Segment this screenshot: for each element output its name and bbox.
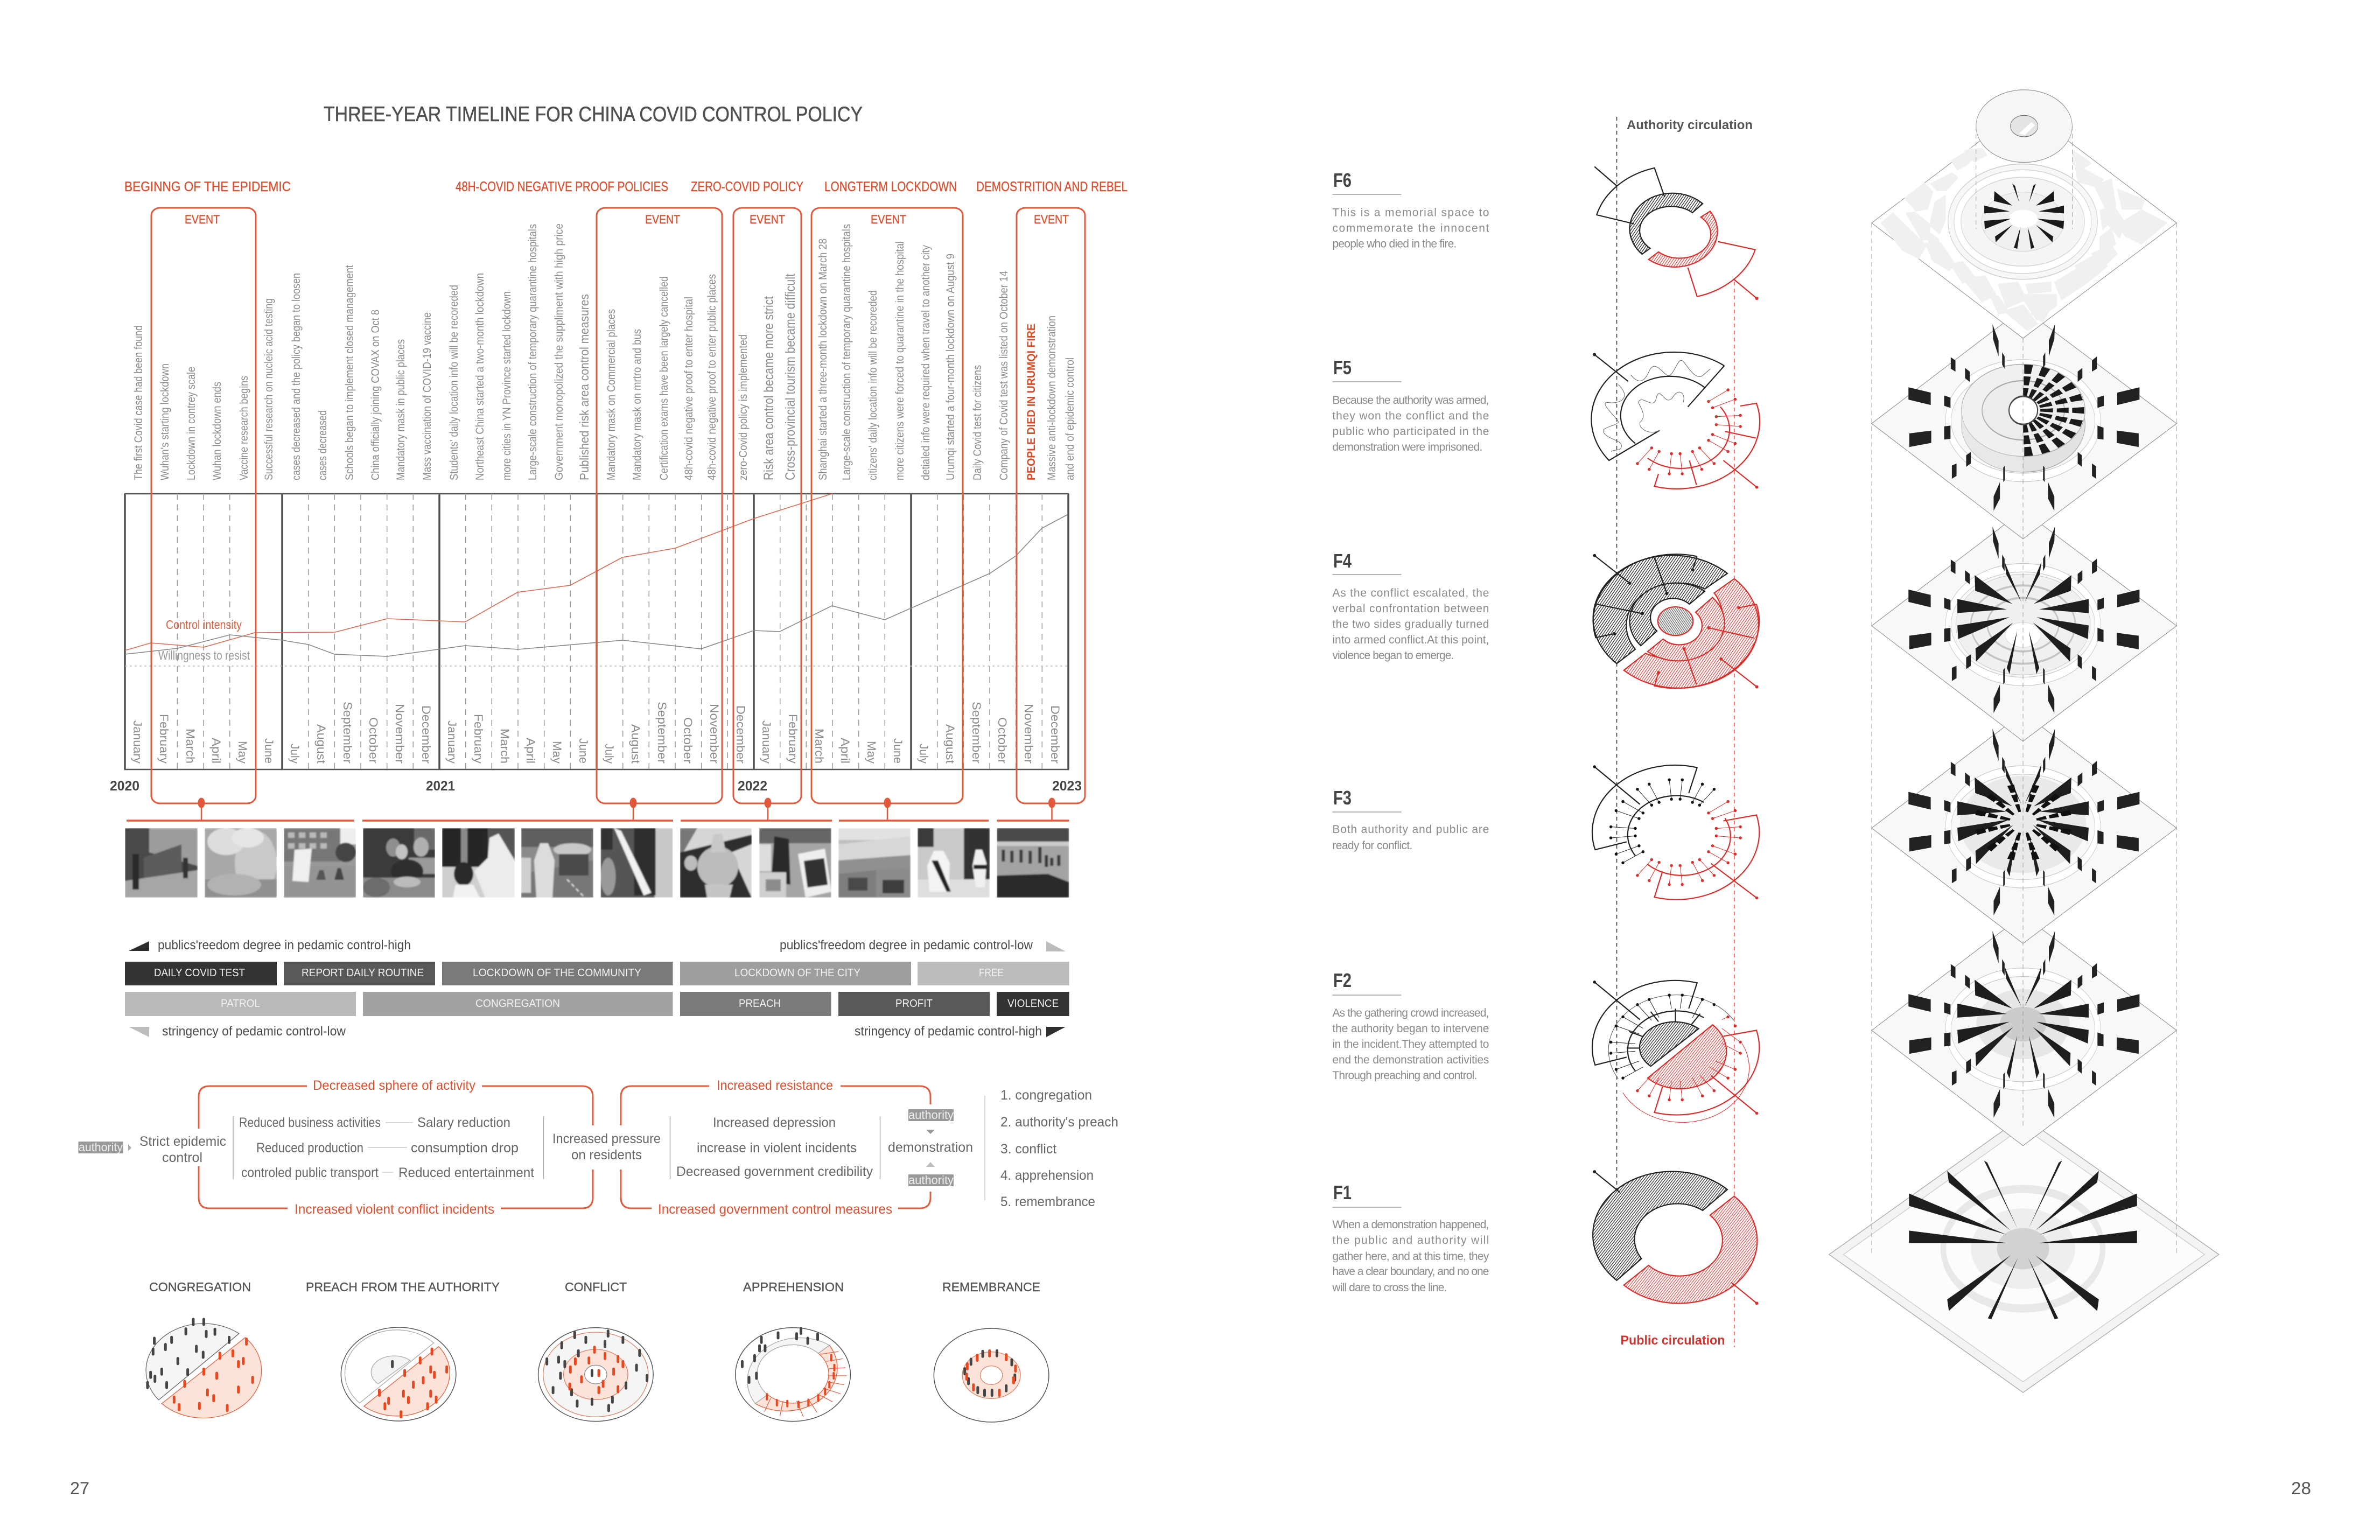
rotated event descriptions: PEOPLE DIED IN URUMQI FIRE [1025, 324, 1038, 480]
bracket: right feedback loop [621, 1086, 930, 1208]
circulation diagrams F6 F5 F4 [1591, 166, 1760, 688]
month axis labels: October [367, 717, 380, 764]
public behaviour bars: REPORT DAILY ROUTINE [302, 967, 424, 979]
panel: F4 description: F4 [1333, 550, 1352, 572]
rotated event descriptions: Successful research on nucleic acid testing [263, 298, 275, 480]
rotated event descriptions: detialed info were required when travel to another city [920, 245, 932, 480]
flow diagram: from strict control to demonstration [79, 1078, 1118, 1217]
panel: F6 description: F6 [1333, 169, 1352, 191]
left consequences: consumption drop [411, 1140, 519, 1156]
photo strip [125, 828, 1069, 898]
rotated event descriptions: 48h-covid negative proof to enter public places [706, 274, 718, 480]
diagram: F2 circulation [1592, 981, 1759, 1122]
layer: F3 plan [1872, 713, 2176, 943]
panel: F6 description: people who died in the fire. [1332, 238, 1457, 250]
panel: F2 description: Through preaching and control. [1332, 1069, 1477, 1082]
month axis labels: February [786, 714, 800, 764]
month axis labels: November [1022, 704, 1035, 764]
photo: temporary hospital beds [838, 828, 911, 898]
panel: F2 description: the authority began to intervene [1332, 1023, 1489, 1035]
month axis labels: September [970, 702, 983, 764]
control measure bars: PREACH [739, 998, 781, 1010]
numbered list of stages: 1. congregation [1000, 1088, 1092, 1103]
panel: F6 description: commemorate the innocent [1332, 222, 1489, 235]
bracket heading: violent conflict: Increased violent conflict incidents [295, 1202, 494, 1217]
panel: F5 description: F5 [1333, 356, 1352, 379]
right consequences: increase in violent incidents [697, 1140, 857, 1156]
rotated event descriptions: citizens' daily location info will be recoreded [867, 290, 879, 480]
month axis labels: November [708, 704, 721, 764]
panel: F3 description: F3 [1333, 787, 1352, 809]
stage headings: PREACH FROM THE AUTHORITY [306, 1280, 500, 1294]
rotated event descriptions: Mass vaccination of COVID-19 vaccine [421, 312, 433, 480]
bracket heading: government control: Increased government control measures [658, 1202, 892, 1217]
month axis labels: December [734, 705, 747, 764]
label: authority circulation: Authority circulation [1627, 118, 1753, 132]
exploded axonometric of the memorial [1829, 90, 2219, 1392]
month axis labels: June [891, 738, 905, 764]
rotated event descriptions: China officially joining COVAX on Oct 8 [369, 310, 382, 480]
rotated event descriptions: Company of Covid test was listed on October 14 [998, 271, 1010, 480]
month axis labels: October [681, 717, 695, 764]
arrow: freedom low [1046, 941, 1066, 951]
diagram: preach from the authority [341, 1327, 456, 1421]
rotated event descriptions: Published risk area control measures [577, 294, 591, 480]
left consequences: controled public transport [241, 1165, 379, 1180]
left consequences [233, 1115, 880, 1180]
rotated event descriptions: 48h-covid negative proof to enter hospital [683, 297, 695, 480]
circulation axis: authority [1616, 117, 1618, 1192]
event labels: EVENT [1034, 213, 1069, 226]
public behaviour bars: FREE [979, 967, 1004, 979]
month axis labels: March [184, 729, 197, 764]
rotated event descriptions: and end of epidemic control [1064, 358, 1076, 480]
rotated event descriptions: cases decreased and the policy began to loosen [290, 273, 303, 480]
panel: F2 description: end the demonstration activities [1332, 1054, 1489, 1066]
rotated event descriptions: Urumqi started a four-month lockdown on August 9 [944, 254, 957, 480]
authority tag and arrow: authority [79, 1140, 123, 1154]
month axis labels: September [341, 702, 354, 764]
panel: F1 description: When a demonstration happened, [1332, 1219, 1489, 1231]
month axis labels: December [419, 705, 433, 764]
rotated event descriptions: Schools began to implement closed management [344, 265, 356, 480]
public behaviour bars: LOCKDOWN OF THE CITY [734, 967, 860, 979]
panel: F2 description: F2 [1333, 969, 1352, 991]
public behaviour bars: DAILY COVID TEST [154, 967, 245, 979]
public behaviour bars: LOCKDOWN OF THE COMMUNITY [473, 967, 641, 979]
photo: protest crowd at night [997, 828, 1069, 898]
increased pressure: Increased pressure [552, 1131, 661, 1146]
right consequences [676, 1115, 873, 1179]
rotated event descriptions: more cities in YN Province started lockdown [501, 291, 513, 480]
photo: masked market shoppers [363, 828, 435, 898]
demonstration node: demonstration [888, 1140, 973, 1155]
event labels: EVENT [185, 213, 220, 226]
diagram: F6 circulation [1594, 166, 1757, 298]
numbered list of stages: 2. authority's preach [1000, 1115, 1118, 1130]
rotated event descriptions: Certification exams have been largely cancelled [658, 276, 670, 480]
willingness to resist line [125, 515, 1067, 656]
panel: F3 description [1332, 787, 1489, 852]
left consequences: Salary reduction [417, 1115, 510, 1130]
panel: F3 description: ready for conflict. [1332, 839, 1412, 852]
panel: F1 description: the public and authority will [1332, 1234, 1489, 1247]
arrow: stringency low [129, 1027, 149, 1037]
diagram: F5 circulation [1591, 352, 1760, 489]
phase headings [124, 179, 1128, 194]
rotated event descriptions: Mandatory mask in public places [395, 339, 407, 480]
page number 28: 28 [2291, 1479, 2311, 1498]
numbered list of stages [985, 1088, 1118, 1209]
control measure bars: VIOLENCE [1007, 998, 1059, 1010]
event labels [185, 213, 1069, 226]
panel: F5 description: public who participated in the [1332, 425, 1489, 438]
month axis labels [131, 702, 1062, 764]
chart label: control intensity: Control intensity [166, 618, 242, 632]
diagram: F3 circulation [1592, 765, 1759, 900]
layer: F5 plan [1872, 308, 2176, 539]
month axis labels: May [236, 741, 249, 764]
rotated event descriptions: Mandatory mask on Commercial places [605, 309, 618, 480]
rotated event descriptions: Massive anti-lockdown demonstration [1046, 316, 1058, 480]
year labels: 2021 [426, 779, 455, 794]
bracket: left feedback loop [199, 1086, 593, 1208]
left consequences: Reduced entertainment [398, 1165, 534, 1180]
rotated event descriptions: Cross-provincial tourism became difficult [783, 274, 798, 480]
phase headings: DEMOSTRITION AND REBEL [976, 179, 1128, 194]
month axis labels: July [917, 744, 930, 764]
stage headings: APPREHENSION [743, 1280, 844, 1294]
event brackets [127, 208, 1085, 821]
diagram: F4 circulation [1593, 554, 1759, 688]
control measure bars: PATROL [221, 998, 260, 1010]
strict epidemic control [139, 1134, 226, 1165]
month axis labels: February [472, 714, 485, 764]
circulation axis: public [1734, 282, 1735, 1347]
page 27: timeline and policy analysis [70, 103, 1128, 1498]
rotated event descriptions: Students' daily location info will be recoreded [448, 285, 460, 480]
month axis labels: August [314, 724, 328, 764]
month axis labels: June [577, 738, 590, 764]
bracket heading: decreased sphere: Decreased sphere of activity [313, 1078, 475, 1093]
panel: F5 description: demonstration were imprisoned. [1332, 441, 1482, 453]
rotated event descriptions: Large-scale construction of temporary quarantine hospitals [527, 224, 539, 480]
strict epidemic control: Strict epidemic [139, 1134, 226, 1149]
panel: F1 description: have a clear boundary, and no one [1332, 1265, 1489, 1278]
panel: F2 description: in the incident.They attempted to [1332, 1038, 1489, 1051]
panel: F6 description [1332, 169, 1489, 250]
public behaviour bars [125, 962, 1069, 985]
phase headings: LONGTERM LOCKDOWN [824, 179, 957, 194]
label: stringency high: stringency of pedamic control-high [855, 1024, 1042, 1039]
phase headings: BEGINNG OF THE EPIDEMIC [124, 179, 291, 194]
month axis labels: February [157, 714, 171, 764]
demonstration node: authority [908, 1108, 954, 1122]
month axis labels: April [838, 738, 852, 764]
title: THREE-YEAR TIMELINE FOR CHINA COVID CONTROL POLICY [324, 103, 863, 126]
stage headings: CONGREGATION [149, 1280, 251, 1294]
rotated event descriptions: Risk area control became more strict [761, 296, 776, 480]
month axis labels: May [550, 741, 564, 764]
panel: F5 description: Because the authority was armed, [1332, 394, 1489, 407]
diagram: conflict [538, 1328, 653, 1422]
year labels [110, 779, 1082, 794]
control intensity line [125, 494, 832, 650]
photo: armed guards in white suits [918, 828, 990, 898]
photo: QR code check [759, 828, 831, 898]
event labels: EVENT [871, 213, 906, 226]
month axis labels: November [393, 704, 407, 764]
demonstration node: authority [908, 1173, 954, 1187]
panel: F6 description: This is a memorial space to [1332, 207, 1489, 219]
numbered list of stages: 5. remembrance [1000, 1194, 1095, 1209]
page number 27: 27 [70, 1479, 89, 1498]
layer: F4 plan [1872, 510, 2176, 741]
month axis labels: March [498, 729, 512, 764]
event labels: EVENT [645, 213, 680, 226]
legend: freedom and stringency scale [125, 938, 1069, 1039]
page 28: floor descriptions and axonometric [1332, 90, 2311, 1498]
diagram: congregation [146, 1319, 262, 1418]
year labels: 2023 [1052, 779, 1082, 794]
layer: F6 ground plan with pavers [1872, 108, 2176, 338]
label: public circulation: Public circulation [1621, 1333, 1725, 1348]
month axis labels: August [629, 724, 642, 764]
strict epidemic control: control [162, 1150, 202, 1165]
diagram: remembrance [934, 1328, 1049, 1422]
panel: F2 description [1332, 969, 1489, 1082]
panel: F4 description: the two sides gradually turned [1332, 618, 1489, 631]
rotated event descriptions: The first Covid case had been found [132, 325, 145, 480]
month axis labels: July [603, 744, 616, 764]
panel: F3 description: Both authority and public are [1332, 823, 1489, 836]
month axis labels: October [996, 717, 1009, 764]
panel: F1 description: will dare to cross the line. [1332, 1282, 1447, 1294]
diagram: apprehension [736, 1328, 850, 1422]
rotated event descriptions: Government monopolized the suppliment with high price [553, 223, 565, 480]
month axis labels: August [943, 724, 957, 764]
panel: F4 description: violence began to emerge. [1332, 649, 1454, 662]
label: freedom low: publics'freedom degree in pedamic control-low [780, 938, 1033, 953]
dashed projection lines [1872, 126, 2176, 1255]
month axis labels: January [760, 720, 773, 764]
control measure bars [125, 992, 1069, 1016]
month axis labels: December [1048, 705, 1062, 764]
month axis labels: June [262, 738, 276, 764]
chart label: willingness to resist: Willingness to resist [158, 648, 250, 662]
arrow: stringency high [1046, 1027, 1066, 1037]
rotated event descriptions: Wuhan lockdown ends [211, 382, 223, 480]
rotated event descriptions: Daily Covid test for citizens [971, 365, 984, 480]
month axis labels: April [209, 738, 223, 764]
panel: F5 description [1332, 356, 1489, 453]
rotated event descriptions [132, 223, 1076, 480]
right consequences: Decreased government credibility [676, 1164, 873, 1179]
circulation diagrams F3 F2 F1 [1592, 765, 1759, 1303]
photo: road closure sign [284, 828, 356, 898]
diagram: F1 circulation [1593, 1172, 1757, 1303]
rotated event descriptions: Wuhan's starting lockdown [159, 363, 171, 480]
photo: police on a train [680, 828, 752, 898]
month axis labels: September [655, 702, 669, 764]
stage headings: CONFLICT [565, 1280, 627, 1294]
right consequences: Increased depression [713, 1115, 836, 1130]
left consequences: Reduced production [256, 1140, 363, 1156]
panel: F4 description: into armed conflict.At this point, [1332, 634, 1489, 646]
event labels: EVENT [750, 213, 785, 226]
increased pressure [552, 1131, 661, 1163]
panel: F1 description [1332, 1181, 1489, 1294]
month axis labels: March [813, 729, 826, 764]
panel: F1 description: F1 [1333, 1181, 1352, 1203]
panel: F5 description: they won the conflict and the [1332, 410, 1489, 422]
photo: door seal banner [601, 828, 673, 898]
increased pressure: on residents [571, 1147, 642, 1163]
rotated event descriptions: Vaccine research begins [238, 376, 250, 480]
rotated event descriptions: Mandatory mask on mrtro and bus [631, 329, 643, 480]
rotated event descriptions: more citizens were forced to quarantine in the hospital [894, 241, 906, 480]
month axis labels: January [445, 720, 459, 764]
numbered list of stages: 3. conflict [1000, 1142, 1056, 1157]
rotated event descriptions: Northeast China started a two-month lockdown [474, 273, 486, 480]
month axis labels: April [524, 738, 537, 764]
layer: F2 plan [1872, 915, 2176, 1146]
left consequences: Reduced business activities [239, 1115, 381, 1130]
month axis labels: May [865, 741, 878, 764]
panel: F4 description: As the conflict escalated, the [1332, 587, 1489, 599]
rotated event descriptions: zero-Covid policy is implemented [737, 334, 750, 480]
demonstration node [888, 1108, 973, 1187]
rotated event descriptions: Large-scale construction of temporary quarantine hospitals [841, 224, 853, 480]
rotated event descriptions: Shanghai started a three-month lockdown on March 28 [817, 239, 829, 480]
year labels: 2020 [110, 779, 139, 794]
phase headings: 48H-COVID NEGATIVE PROOF POLICIES [456, 179, 668, 194]
stage headings: REMEMBRANCE [942, 1280, 1040, 1294]
label: freedom high: publics'reedom degree in pedamic control-high [158, 938, 411, 953]
label: stringency low: stringency of pedamic control-low [162, 1024, 346, 1039]
control measure bars: CONGREGATION [475, 998, 560, 1010]
month axis labels: July [288, 744, 302, 764]
panel: F1 description: gather here, and at this time, they [1332, 1250, 1489, 1263]
photo: medical workers in protective suits [205, 828, 277, 898]
layer: F1 base plaza [1829, 1116, 2219, 1392]
stage diagrams [146, 1319, 1049, 1422]
rotated event descriptions: cases decreased [317, 410, 329, 480]
layer: roof disc [1976, 90, 2072, 162]
numbered list of stages: 4. apprehension [1000, 1168, 1094, 1183]
panel: F4 description [1332, 550, 1489, 662]
photo: nucleic acid test [442, 828, 515, 898]
photo: street at night [125, 828, 198, 898]
photo: worker on the road [521, 828, 593, 898]
control measure bars: PROFIT [895, 998, 933, 1010]
month axis labels: January [131, 720, 144, 764]
year labels: 2022 [738, 779, 767, 794]
rotated event descriptions: Lockdown in contrey scale [185, 367, 198, 480]
panel: F2 description: As the gathering crowd increased, [1332, 1007, 1489, 1019]
panel: F4 description: verbal confrontation between [1332, 603, 1489, 615]
stage headings [149, 1280, 1040, 1294]
bracket heading: increased resistance: Increased resistance [717, 1078, 833, 1093]
arrow: freedom high [129, 941, 149, 951]
line chart: control intensity vs willingness to resist [125, 494, 1068, 769]
phase headings: ZERO-COVID POLICY [691, 179, 803, 194]
